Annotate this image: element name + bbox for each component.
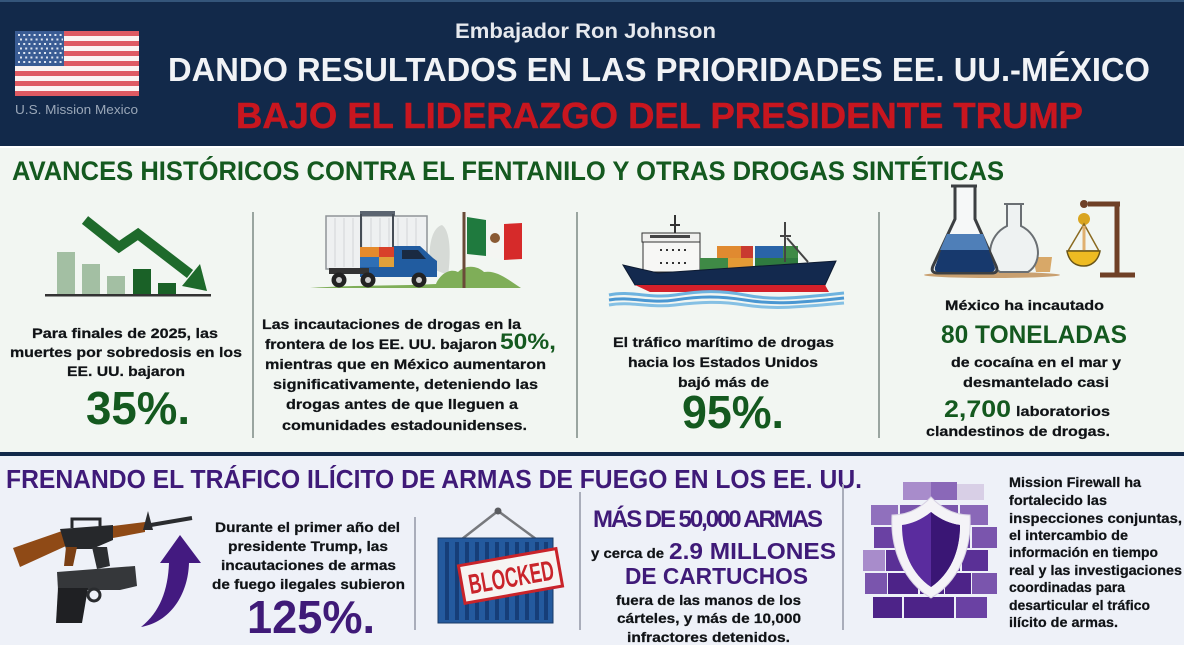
text: firearm description [212,519,405,592]
icon: blocked container [438,508,563,623]
text: seizure figures: clandestinos de drogas. [926,423,1110,439]
text: Mission Firewall: información en tiempo [1009,544,1158,560]
text: seizure figures: México ha incautado [945,297,1104,313]
text: overdose description [10,325,242,379]
panel: maritime traffic [609,215,844,438]
text: Mission Firewall: el intercambio de [1009,527,1128,543]
text: seizures description: comunidades estadounidenses. [282,417,527,433]
text: y cerca de: y cerca de [591,545,664,561]
stat: 50,000 arms: MÁS DE 50,000 ARMAS [593,505,823,533]
text: overdose description: EE. UU. bajaron [67,363,185,379]
stat: 95%: 95%. [682,386,784,438]
text: seizures description: significativamente, deteniendo las [273,376,538,392]
text: Mission Firewall: Mission Firewall ha [1009,474,1141,490]
text: seizure figures: desmantelado casi [963,374,1109,390]
icon: falling bar chart with arrow [45,220,211,296]
icon: US flag [15,31,139,96]
text: cartel description: fuera de las manos de los [616,592,801,608]
panel: border seizures [262,211,556,433]
icon: blocked container: BLOCKED [466,555,556,600]
text: seizure figures: 2,700 [944,396,1011,423]
text: seizure figures [926,297,1127,439]
icon: lab flasks and scale [924,186,1135,278]
text: maritime description: El tráfico marítimo de drogas [613,334,834,350]
text: seizures description: frontera de los EE. UU. bajaron [265,336,497,352]
text: seizure figures: laboratorios [1016,403,1110,419]
icon: rifle and pistol [13,511,192,623]
title: DANDO RESULTADOS EN LAS PRIORIDADES EE. UU.-MÉXICO [168,51,1150,88]
heading: fentanyl section: AVANCES HISTÓRICOS CONTRA EL FENTANILO Y OTRAS DROGAS SINTÉTICAS [12,156,1004,186]
text: Mission Firewall: ilícito de armas. [1009,614,1118,630]
text: maritime description: bajó más de [678,374,769,390]
icon: truck and Mexican flag [310,211,522,288]
icon: cargo ship [609,215,844,307]
panel: overdose deaths [10,220,242,434]
text: seizures description: drogas antes de que lleguen a [286,396,518,412]
stat: 125%: 125%. [247,591,375,643]
stat: 35%: 35%. [86,382,190,434]
icon: shield and brick wall [863,482,997,618]
header: ambassador name: Embajador Ron Johnson [455,20,716,43]
text: firearm description: Durante el primer año del [215,519,400,535]
text: cartel description: infractores detenidos. [627,629,790,645]
label: U.S. Mission Mexico: U.S. Mission Mexico [15,102,138,117]
subtitle: BAJO EL LIDERAZGO DEL PRESIDENTE TRUMP [236,95,1083,136]
text: Mission Firewall [1009,474,1182,630]
text: firearm description: presidente Trump, las [228,538,388,554]
text: maritime description [613,334,834,390]
text: seizures description: 50%, [500,329,556,354]
text: seizure figures: de cocaína en el mar y [951,354,1121,370]
text: seizures description [262,316,556,433]
text: cartel description [616,592,801,645]
icon: up arrow [141,535,201,627]
text: Mission Firewall: inspecciones conjuntas, [1009,510,1182,526]
panel: cocaine and labs [924,186,1135,439]
panel: header banner [0,0,1184,146]
stat: 2.9 million: 2.9 MILLONES [669,538,836,564]
text: maritime description: hacia los Estados Unidos [628,354,818,370]
panel: firearm seizures [13,511,405,643]
stat: cartridges: DE CARTUCHOS [625,563,808,589]
text: seizures description: Las incautaciones de drogas en la [262,316,521,332]
text: firearm description: incautaciones de armas [221,557,396,573]
panel: seized arms totals [591,505,836,645]
text: Mission Firewall: fortalecido las [1009,492,1107,508]
text: Mission Firewall: coordinadas para [1009,579,1125,595]
text: Mission Firewall: desarticular el tráfico [1009,597,1150,613]
text: seizures description: mientras que en México aumentaron [265,356,546,372]
text: cartel description: cárteles, y más de 10,000 [617,610,801,626]
text: seizure figures: 80 TONELADAS [941,321,1127,349]
text: overdose description: muertes por sobredosis en los [10,344,242,360]
text: firearm description: de fuego ilegales subieron [212,576,405,592]
heading: firearms section: FRENANDO EL TRÁFICO ILÍCITO DE ARMAS DE FUEGO EN LOS EE. UU. [6,465,862,494]
text: overdose description: Para finales de 2025, las [32,325,218,341]
text: Mission Firewall: real y las investigaciones [1009,562,1182,578]
